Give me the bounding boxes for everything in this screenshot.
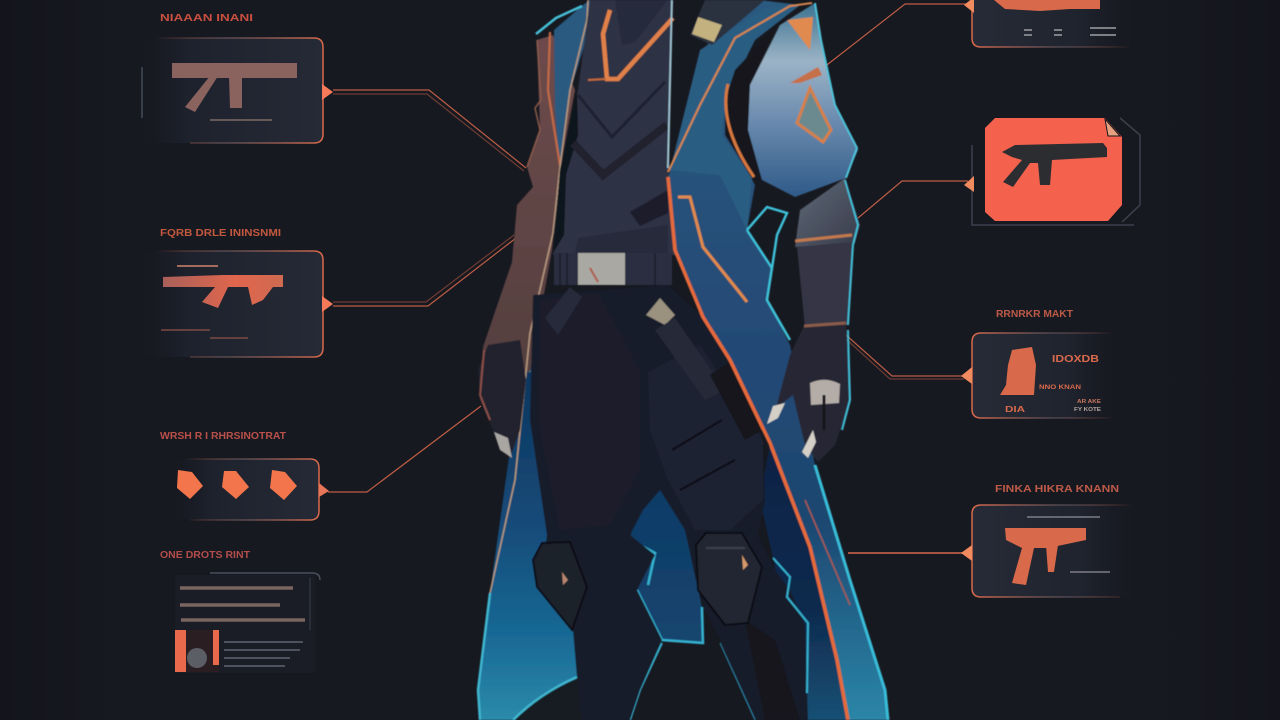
card — [972, 333, 1113, 418]
left sleeve — [482, 35, 575, 372]
right forearm — [795, 178, 860, 328]
shoulder strap — [690, 0, 765, 45]
icon: shard two — [222, 471, 249, 499]
shirt — [553, 0, 675, 255]
thumbnail — [175, 630, 219, 672]
heading: FINKA HIKRA KNANN — [995, 484, 1119, 495]
heading: NIAAAN INANI — [160, 13, 253, 24]
card — [972, 505, 1133, 597]
node — [322, 296, 333, 312]
stat labels: NNO KNAN — [1039, 384, 1081, 391]
spec text — [1024, 28, 1116, 35]
trousers — [530, 285, 808, 720]
sleeve dark gap — [725, 22, 780, 180]
orange collar v — [588, 10, 673, 80]
icon: rifle — [163, 275, 283, 308]
node — [961, 545, 972, 561]
upper sleeve — [748, 3, 858, 197]
knee pad left — [533, 542, 587, 630]
panel: notes list — [160, 550, 320, 673]
icon: shard three — [270, 470, 297, 500]
spec lines — [1027, 517, 1110, 572]
frame — [972, 118, 1140, 225]
connector lines — [328, 4, 968, 553]
card — [985, 118, 1122, 221]
knee pad right — [696, 533, 762, 625]
panel: middle left weapon — [143, 228, 333, 357]
icon: shard one — [177, 470, 203, 499]
coat front right — [668, 0, 889, 720]
card — [143, 251, 323, 357]
card — [175, 459, 319, 520]
panel: armour stats: DIA — [1005, 405, 1025, 414]
left hand — [478, 340, 526, 458]
panel: armour stats: AR AKE — [1077, 399, 1101, 405]
icon: armour — [1000, 347, 1036, 395]
left coat lapel — [490, 0, 590, 593]
holster strap — [545, 287, 762, 440]
panel: highlighted weapon — [964, 118, 1140, 225]
right hand glove — [767, 323, 850, 462]
panel: top left weapon — [142, 13, 333, 143]
cyan leg lines — [773, 558, 808, 693]
heading: RRNRKR MAKT — [996, 309, 1073, 320]
stat number: IDOXDB — [1052, 354, 1099, 365]
icon: rifle — [994, 0, 1100, 11]
cape back left — [478, 310, 590, 720]
node — [322, 84, 333, 100]
node — [961, 367, 972, 384]
neck — [615, 0, 668, 45]
node — [964, 176, 974, 192]
icon: rifle — [1002, 143, 1107, 187]
node — [964, 0, 974, 13]
node — [319, 483, 329, 497]
icon: rifle — [172, 63, 297, 112]
panel: armour stats — [961, 309, 1113, 418]
text rows — [180, 588, 305, 620]
coat inner lining — [760, 443, 848, 720]
character figure — [478, 0, 889, 720]
card — [210, 573, 320, 580]
card — [972, 0, 1130, 47]
belt — [554, 253, 672, 285]
panel: ammo icons — [160, 431, 329, 520]
heading: FQRB DRLE ININSNMI — [160, 228, 281, 239]
caption lines — [224, 642, 303, 666]
heading: WRSH R I RHRSINOTRAT — [160, 431, 286, 442]
panel: lower right weapon — [961, 484, 1133, 597]
cape back centre — [630, 463, 703, 720]
panel: armour stats: FY KOTE — [1074, 407, 1101, 413]
panel: top right weapon — [964, 0, 1130, 47]
card — [143, 38, 323, 143]
heading: ONE DROTS RINT — [160, 550, 250, 561]
icon: pistol — [1005, 528, 1086, 585]
